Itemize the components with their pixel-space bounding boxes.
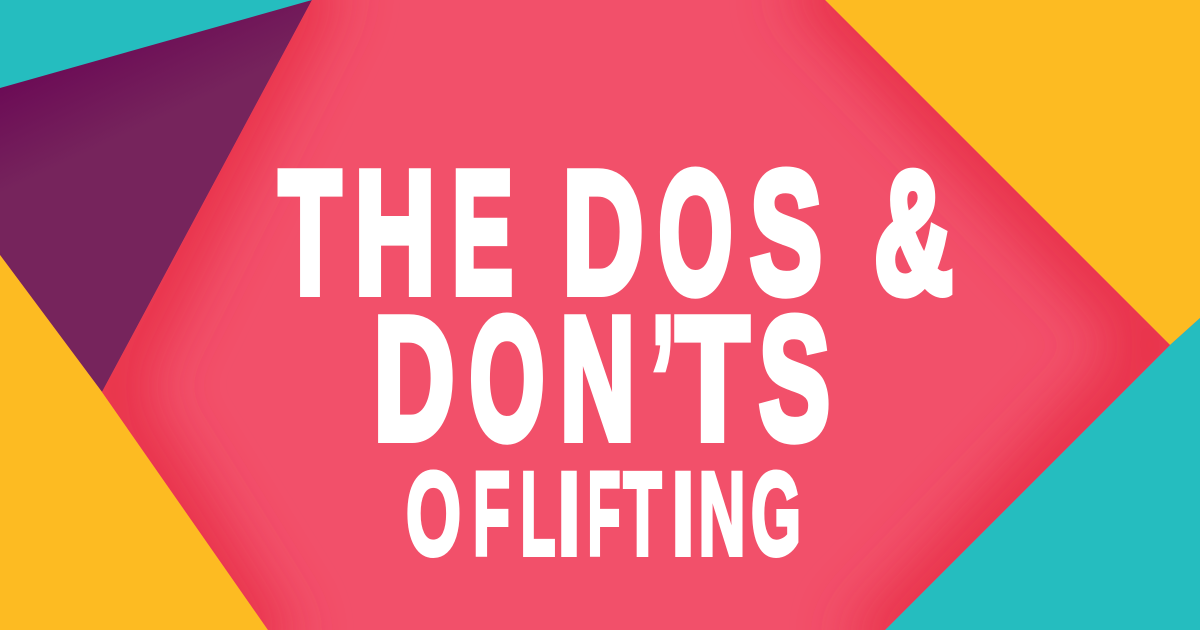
subtitle: OF LIFTING: F [588,448,620,580]
title word: DON'TS: N [560,280,635,476]
title word: THE: T [279,134,341,330]
panel: teal lower-right wedge [885,318,1200,630]
title word: DOS [562,134,822,330]
title word: DON'TS: ’ [652,280,674,476]
title word: DON'TS [374,280,830,476]
title word: DON'TS: D [374,280,454,476]
title word: DON'TS: T [676,280,749,476]
subtitle: OF LIFTING: O [406,448,461,580]
title word: THE: H [354,134,436,330]
title word: DOS: D [562,134,644,330]
subtitle: OF LIFTING: G [751,448,801,580]
subtitle: OF LIFTING [406,448,801,580]
subtitle: OF LIFTING: T [624,448,662,580]
panel: purple wedge [0,0,312,392]
title word: ampersand: & [874,134,953,330]
title word: THE [279,134,513,330]
title word: THE: E [452,134,513,330]
title word: DON'TS: S [759,280,830,476]
title word: DOS: O [658,134,732,330]
subtitle: OF LIFTING: L [520,448,556,580]
title [279,134,953,580]
title word: DON'TS: O [470,280,544,476]
title word: DOS: S [750,134,822,330]
panel: yellow top-right wedge [825,0,1200,345]
subtitle: OF LIFTING: I [672,448,694,580]
panel: yellow lower-left wedge [0,255,268,630]
subtitle: OF LIFTING: N [698,448,746,580]
panel: teal top-left triangle [0,0,314,90]
subtitle: OF LIFTING: F [473,448,510,580]
subtitle: OF LIFTING: I [558,448,580,580]
